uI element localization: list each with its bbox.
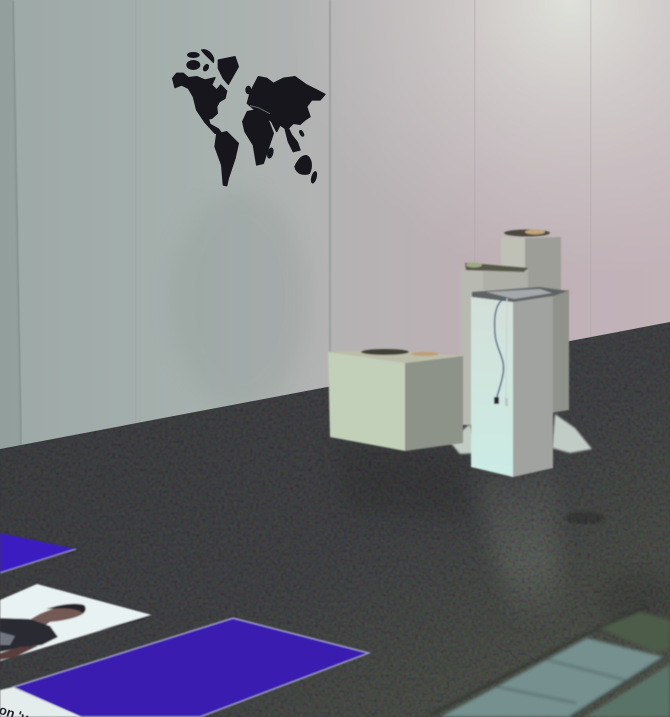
pedestal left face: [471, 297, 513, 477]
back pedestal: [460, 270, 569, 425]
Japan: [303, 113, 309, 120]
pedestal top: [472, 287, 568, 302]
floor grain texture: [0, 320, 670, 717]
South America: [215, 132, 238, 186]
tall pedestal: [471, 287, 568, 477]
North America: [173, 73, 227, 133]
Arctic islands: [187, 50, 214, 72]
cube right face: [405, 356, 463, 451]
floor tiles bottom right: [430, 606, 670, 717]
middle box: [465, 262, 528, 290]
Greenland: [218, 57, 238, 84]
cube top with objects: [328, 350, 463, 363]
objects on upper box: [504, 230, 550, 236]
New Zealand: [311, 171, 317, 183]
Madagascar: [267, 148, 274, 158]
upper box: [501, 230, 561, 292]
Indonesia: [299, 130, 304, 137]
low cube: [328, 349, 463, 451]
portrait head: [30, 604, 86, 626]
pedestal right face: [513, 296, 553, 477]
white panel with text fragment: [0, 687, 82, 717]
Eurasia and Africa: [243, 77, 325, 165]
plastic bag under pedestals: [449, 408, 592, 454]
portrait torso: [0, 618, 58, 652]
Iceland and Britain: [246, 86, 251, 94]
cable and plug: [495, 298, 507, 400]
blue floor panel top left: [0, 533, 82, 573]
cube left face: [328, 352, 405, 451]
Mediterranean gap: [250, 106, 270, 114]
floor: [0, 322, 670, 717]
Australia: [295, 156, 311, 174]
world map: [173, 50, 325, 186]
large blue floor panel: [13, 618, 369, 717]
wall: [0, 0, 670, 460]
poster with portrait: [0, 584, 154, 661]
